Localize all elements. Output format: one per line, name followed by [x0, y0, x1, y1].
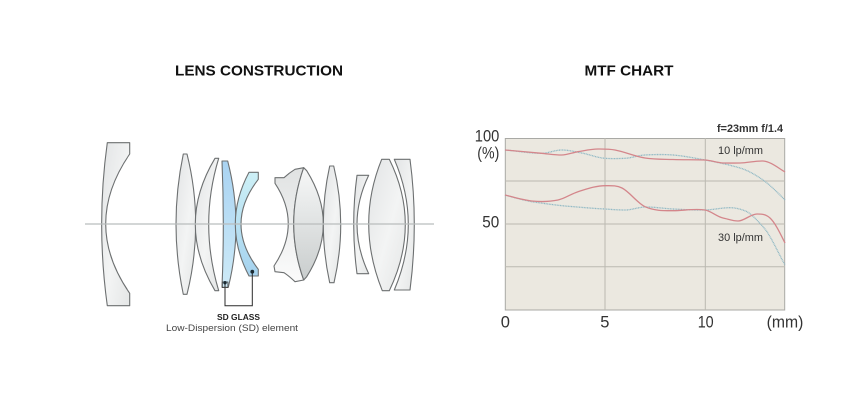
x axis labels: 5 — [600, 314, 609, 332]
SD glass callout bracket — [222, 270, 254, 306]
optical axis — [85, 223, 434, 225]
lens element 9 — [354, 175, 369, 274]
x axis labels — [501, 314, 803, 332]
plot area — [505, 138, 785, 310]
lens element 7 — [294, 168, 323, 280]
y axis labels: 50 — [482, 214, 499, 232]
lens construction diagram — [102, 143, 414, 306]
curve: 10 lp/mm dotted blue — [505, 150, 785, 200]
x axis labels: 0 — [501, 314, 510, 332]
y axis labels: 100 — [475, 128, 499, 146]
focal length and aperture label: f=23mm f/1.4 — [717, 123, 784, 135]
30 lp/mm label: 30 lp/mm — [718, 232, 763, 244]
lens element 6 — [274, 168, 304, 282]
lens element 1 — [102, 143, 130, 306]
x axis labels: (mm) — [767, 314, 803, 332]
y axis labels — [475, 128, 499, 232]
title: lens construction: LENS CONSTRUCTION — [175, 62, 343, 80]
lens element 10 — [369, 159, 405, 291]
lens element 2 — [176, 154, 196, 294]
x axis labels: 10 — [698, 314, 714, 332]
curve: 30 lp/mm dotted blue — [505, 195, 785, 265]
lens element 8 — [323, 166, 341, 283]
curve: 10 lp/mm red — [505, 149, 785, 172]
lens element 11 — [394, 159, 414, 290]
lens element 3 — [195, 158, 219, 291]
SD glass description: Low-Dispersion (SD) element — [166, 323, 298, 334]
lens element 5: SD glass — [235, 172, 258, 276]
10 lp/mm label: 10 lp/mm — [718, 145, 763, 157]
SD glass label: SD GLASS — [217, 312, 260, 322]
y axis labels: (%) — [477, 144, 499, 162]
lens element 4: SD glass — [222, 161, 236, 287]
MTF chart — [505, 138, 785, 310]
curve: 30 lp/mm red — [505, 186, 785, 243]
title: MTF chart: MTF CHART — [584, 62, 674, 80]
